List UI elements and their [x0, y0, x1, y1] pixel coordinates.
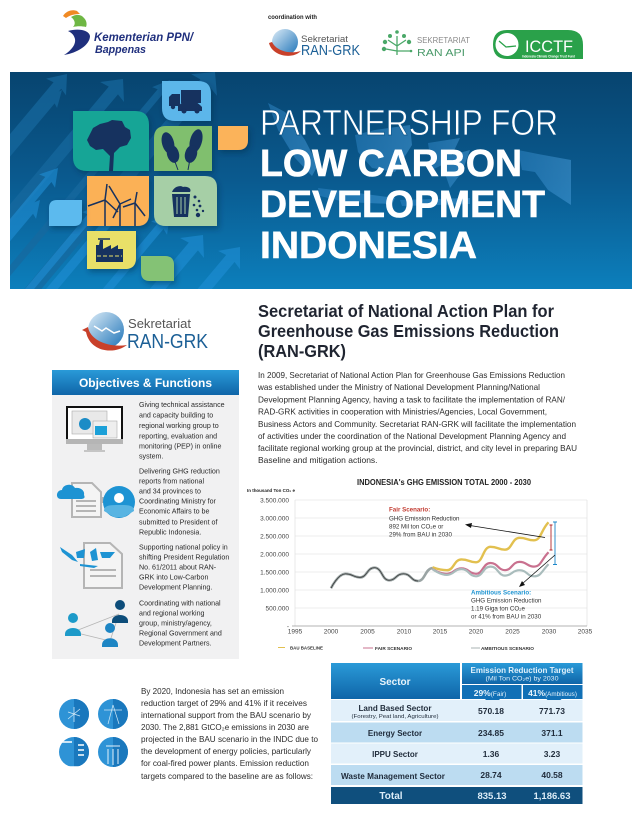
text: objective 1: and capacity building to [139, 412, 213, 420]
line: ambitious scenario [432, 564, 548, 576]
tile: truck [162, 81, 211, 121]
text: objective 2: Economic Affairs to be [139, 508, 210, 516]
tile: small blue [49, 200, 82, 226]
y axis labels [260, 498, 289, 630]
tile: wheat [154, 126, 212, 171]
text: introduction: of activities under the coordination of the National Development Planning Agency and [258, 431, 566, 441]
text: objective 3: Supporting national policy in [139, 544, 228, 552]
icon: power line [98, 699, 128, 729]
icons: four sector circles [59, 699, 128, 767]
y axis labels: 3.000.000 [260, 516, 289, 522]
table header: Emission Reduction Target [470, 666, 574, 675]
banner title: DEVELOPMENT [260, 184, 545, 226]
logo: Kementerian PPN/Bappenas: Kementerian PPN/ [94, 31, 195, 44]
y axis labels: 500.000 [266, 606, 289, 612]
callout: ambitious scenario: 1.19 Giga ton CO₂e [471, 606, 526, 612]
bracket: fair reduction [550, 525, 552, 550]
table rows [331, 700, 582, 785]
logo: RAN-GRK large: Sekretariat [128, 317, 192, 331]
logo: Kementerian PPN/Bappenas [63, 10, 195, 56]
text: 2020 targets: By 2020, Indonesia has set an emission [141, 686, 284, 696]
logo: RAN-GRK small: Sekretariat [301, 34, 348, 45]
text: introduction: facilitate regional working group at the provincial, district, and city level in preparing BAU [258, 443, 577, 453]
legend: FAIR SCENARIO [375, 646, 412, 652]
tile: wind turbines [87, 176, 149, 226]
banner [10, 72, 632, 289]
panel header: Objectives & Functions [79, 378, 212, 390]
table rows: 40.58 [541, 770, 563, 780]
tile: factory [87, 231, 136, 269]
text: objective 3: shifting President Regulation [139, 554, 229, 562]
y axis unit: In thousand Ton CO₂ e [247, 488, 295, 493]
x axis labels: 2025 [505, 628, 520, 636]
chart: GHG emission total [247, 477, 593, 652]
panel: objectives and functions [52, 370, 239, 659]
logo: RAN-GRK large: RAN-GRK [127, 331, 209, 353]
table: emission reduction targets [331, 663, 582, 804]
text: objective 1: reporting, evaluation and [139, 432, 217, 440]
table total row: Total [379, 791, 403, 802]
table rows: Waste Management Sector [341, 772, 445, 781]
tile: small orange [218, 126, 248, 150]
text: objective 1: regional working group to [139, 422, 219, 430]
logo: RAN-GRK large [82, 312, 209, 353]
x axis labels: 2010 [397, 628, 412, 636]
table rows: IPPU Sector [372, 750, 418, 759]
logo: ICCTF: Indonesia Climate Change Trust Fund [522, 54, 575, 58]
table rows: 3.23 [544, 749, 561, 759]
text: objective 3: GRK into Low-Carbon [139, 574, 208, 582]
heading: secretariat: Greenhouse Gas Emissions Reduction [258, 321, 559, 341]
coordination label: coordination with [268, 15, 317, 21]
callout: ambitious scenario: or 41% from BAU in 2030 [471, 614, 542, 620]
x axis labels: 2005 [360, 628, 375, 636]
panel header [52, 370, 239, 395]
callout: fair scenario: Fair Scenario: [389, 506, 430, 514]
text: objective 3 [139, 544, 229, 592]
icon: monitor [66, 406, 123, 452]
table rows: 1.36 [483, 749, 500, 759]
logo: RAN API [382, 30, 470, 59]
table header: 41%(Ambitious) [528, 688, 577, 698]
logo: Kementerian PPN/Bappenas: Bappenas [95, 44, 146, 56]
x axis labels: 2035 [578, 628, 593, 636]
text: 2020 targets: projected in the BAU scenario in the INDC due to [141, 734, 318, 744]
table header [331, 663, 582, 706]
banner title [260, 102, 558, 267]
table rows: 234.85 [478, 728, 504, 738]
text: 2020 targets: targets compared to the baseline are as follows: [141, 771, 313, 781]
text: introduction: Development Planning Agency, having a task to facilitate the implementation of RAN/ [258, 394, 566, 404]
banner title: LOW CARBON [260, 143, 522, 185]
x axis labels: 2000 [324, 628, 339, 636]
callout: ambitious scenario: Ambitious Scenario: [471, 590, 531, 596]
text: objective 3: Development Planning. [139, 584, 212, 592]
table rows: 570.18 [478, 706, 504, 716]
text: objective 4: Regional Government and [139, 630, 222, 638]
icon: map document [60, 543, 122, 588]
text: 2020 targets: for coal-fired power plants. Emission reduction [141, 758, 309, 768]
arrow: ambitious [519, 555, 555, 587]
world map [268, 103, 571, 206]
table header: 29%(Fair) [474, 688, 506, 698]
text: introduction [257, 370, 577, 465]
text: objective 1: Giving technical assistance [139, 401, 225, 409]
callout: fair scenario: GHG Emission Reduction [389, 516, 460, 522]
icon: report to official [57, 483, 135, 518]
logo: RAN-GRK small [269, 29, 360, 59]
text: objective 2: submitted to President of [139, 518, 217, 526]
x axis labels: 1995 [288, 628, 303, 636]
logo: RAN-GRK small: RAN-GRK [301, 43, 360, 59]
background arrows [10, 72, 240, 289]
text: objective 2: Delivering GHG reduction [139, 468, 220, 476]
y axis labels: 2.000.000 [260, 552, 289, 558]
legend [278, 646, 534, 652]
text: introduction: was established under the Ministry of National Development Planning/National [257, 382, 540, 392]
y axis labels: 2.500.000 [260, 534, 289, 540]
logo: RAN API: RAN API [417, 48, 465, 59]
heading: secretariat: Secretariat of National Action Plan for [258, 301, 554, 321]
text: introduction: In 2009, Secretariat of National Action Plan for Greenhouse Gas Emissions Reduction [258, 370, 565, 380]
icon: factory [59, 737, 89, 767]
callout: fair scenario: 29% from BAU in 2030 [389, 532, 452, 538]
text: objective 4: Coordinating with national [139, 600, 221, 608]
heading: secretariat [258, 301, 559, 361]
logo: RAN API: SEKRETARIAT [417, 36, 470, 45]
table total row [331, 787, 582, 804]
chart title: INDONESIA's GHG EMISSION TOTAL 2000 - 2030 [357, 477, 531, 487]
text: 2020 targets [141, 686, 318, 781]
banner title: INDONESIA [260, 225, 477, 267]
text: objective 3: No. 61/2011 about RAN- [139, 564, 217, 572]
table header: Sector [379, 677, 411, 688]
text: objective 2: Coordinating Ministry for [139, 498, 217, 506]
text: 2020 targets: the development of energy policies, particularly [141, 746, 312, 756]
tile: waste bin [154, 176, 217, 226]
table total row: 835.13 [477, 791, 507, 802]
text: introduction: Baseline and mitigation actions. [258, 455, 378, 465]
legend: AMBITIOUS SCENARIO [481, 646, 534, 652]
table total row: 1,186.63 [534, 791, 570, 802]
y axis labels: 1.000.000 [260, 588, 289, 594]
callout: fair scenario [389, 506, 460, 538]
text: introduction: Business Actors and Community. Secretariat RAN-GRK will facilitate the implementation [258, 419, 576, 429]
line: BAU baseline [432, 522, 548, 570]
icon: wind [59, 699, 89, 729]
text: objective 4: group, ministry/agency, [139, 620, 212, 628]
icon: bin [98, 737, 128, 767]
icon: network of people [65, 600, 128, 647]
logo: ICCTF [493, 30, 583, 59]
arrow: fair [465, 523, 545, 538]
tile: small green [141, 256, 174, 281]
text: objective 4: Development Partners. [139, 640, 212, 648]
logo: ICCTF: ICCTF [525, 37, 573, 56]
text: objective 1 [139, 401, 225, 460]
text: objective 2 [139, 468, 220, 536]
text: 2020 targets: international support from the BAU scenario by [141, 710, 312, 720]
text: objective 4: and regional working [139, 610, 205, 618]
callout: fair scenario: 892 Mil ton CO₂e or [389, 524, 443, 530]
line: historical emissions [331, 568, 432, 588]
x axis labels: 2015 [433, 628, 448, 636]
text: objective 2: and 34 provinces to [139, 488, 201, 496]
legend: BAU BASELINE [290, 646, 324, 652]
bracket: ambitious reduction [553, 522, 557, 564]
table rows: (Forestry, Peat land, Agriculture) [352, 714, 439, 720]
table rows: Energy Sector [368, 729, 422, 738]
y axis labels: 1.500.000 [260, 570, 289, 576]
table rows: 771.73 [539, 706, 565, 716]
text: objective 1: system. [139, 452, 163, 460]
text: introduction: RAD-GRK activities in cooperation with Ministries/Agencies, Local Government, [258, 406, 547, 416]
callout: ambitious scenario: GHG Emission Reduction [471, 598, 542, 604]
y axis labels: 3.500.000 [260, 498, 289, 504]
tile: tree [73, 111, 149, 171]
x axis labels [288, 628, 593, 636]
table header: (Mil Ton CO₂e) by 2030 [486, 676, 559, 682]
callout: ambitious scenario [471, 590, 542, 620]
text: 2020 targets: 2030. The 2,881 GtCO₂e emissions in 2030 are [141, 722, 309, 732]
table rows: 371.1 [541, 728, 563, 738]
table rows: 28.74 [480, 770, 502, 780]
heading: secretariat: (RAN-GRK) [258, 341, 346, 361]
text: objective 1: monitoring (PEP) in online [139, 442, 221, 450]
x axis labels: 2020 [469, 628, 484, 636]
text: 2020 targets: reduction target of 29% and 41% if it receives [141, 698, 307, 708]
text: objective 4 [139, 600, 222, 648]
line: fair scenario [432, 552, 548, 574]
banner title: PARTNERSHIP FOR [260, 102, 558, 143]
table rows: Land Based Sector [358, 704, 432, 713]
x axis labels: 2030 [542, 628, 557, 636]
y axis labels: - [287, 624, 289, 630]
text: objective 2: Republic Indonesia. [139, 528, 201, 536]
text: objective 2: reports from national [139, 478, 204, 486]
